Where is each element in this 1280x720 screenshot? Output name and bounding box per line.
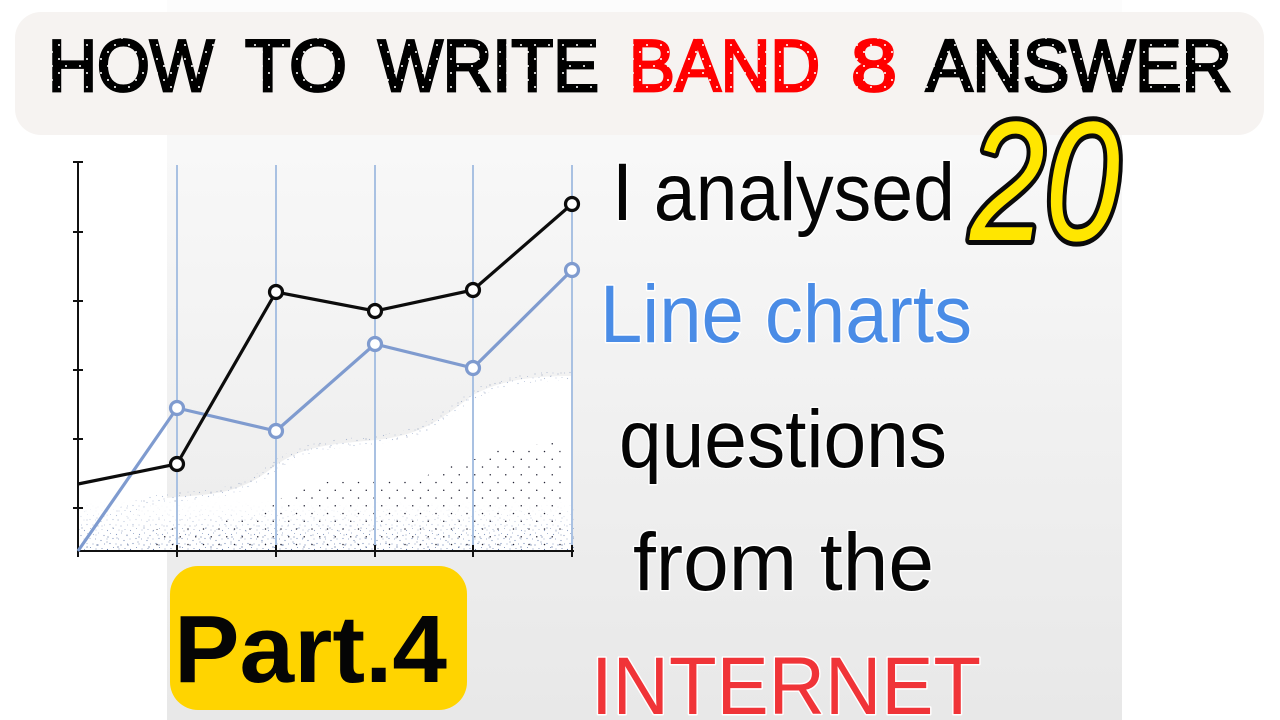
title text [48,26,1232,107]
stippled area [78,370,574,551]
line: questions: questions [619,394,947,485]
title text: BAND [629,26,820,107]
chart [73,162,578,557]
title text: WRITE [378,26,599,107]
line: I analysed: I analysed [612,147,955,238]
title text: ANSWER [926,26,1232,107]
line: Line charts: Line charts [600,269,972,360]
part badge [170,566,467,710]
title text: TO [245,26,347,107]
gradient panel [167,0,1122,720]
line: from the: from the [633,517,934,608]
title banner [15,12,1264,135]
series: blue line [78,264,578,551]
axes [73,162,574,557]
gridlines [177,165,572,551]
text block: headline lines [591,147,981,720]
title text: 8 [851,26,897,107]
part label: Part.4 [174,596,447,703]
series: black line [78,198,578,484]
title text: HOW [48,26,214,107]
big number 20: 20 [969,87,1120,277]
